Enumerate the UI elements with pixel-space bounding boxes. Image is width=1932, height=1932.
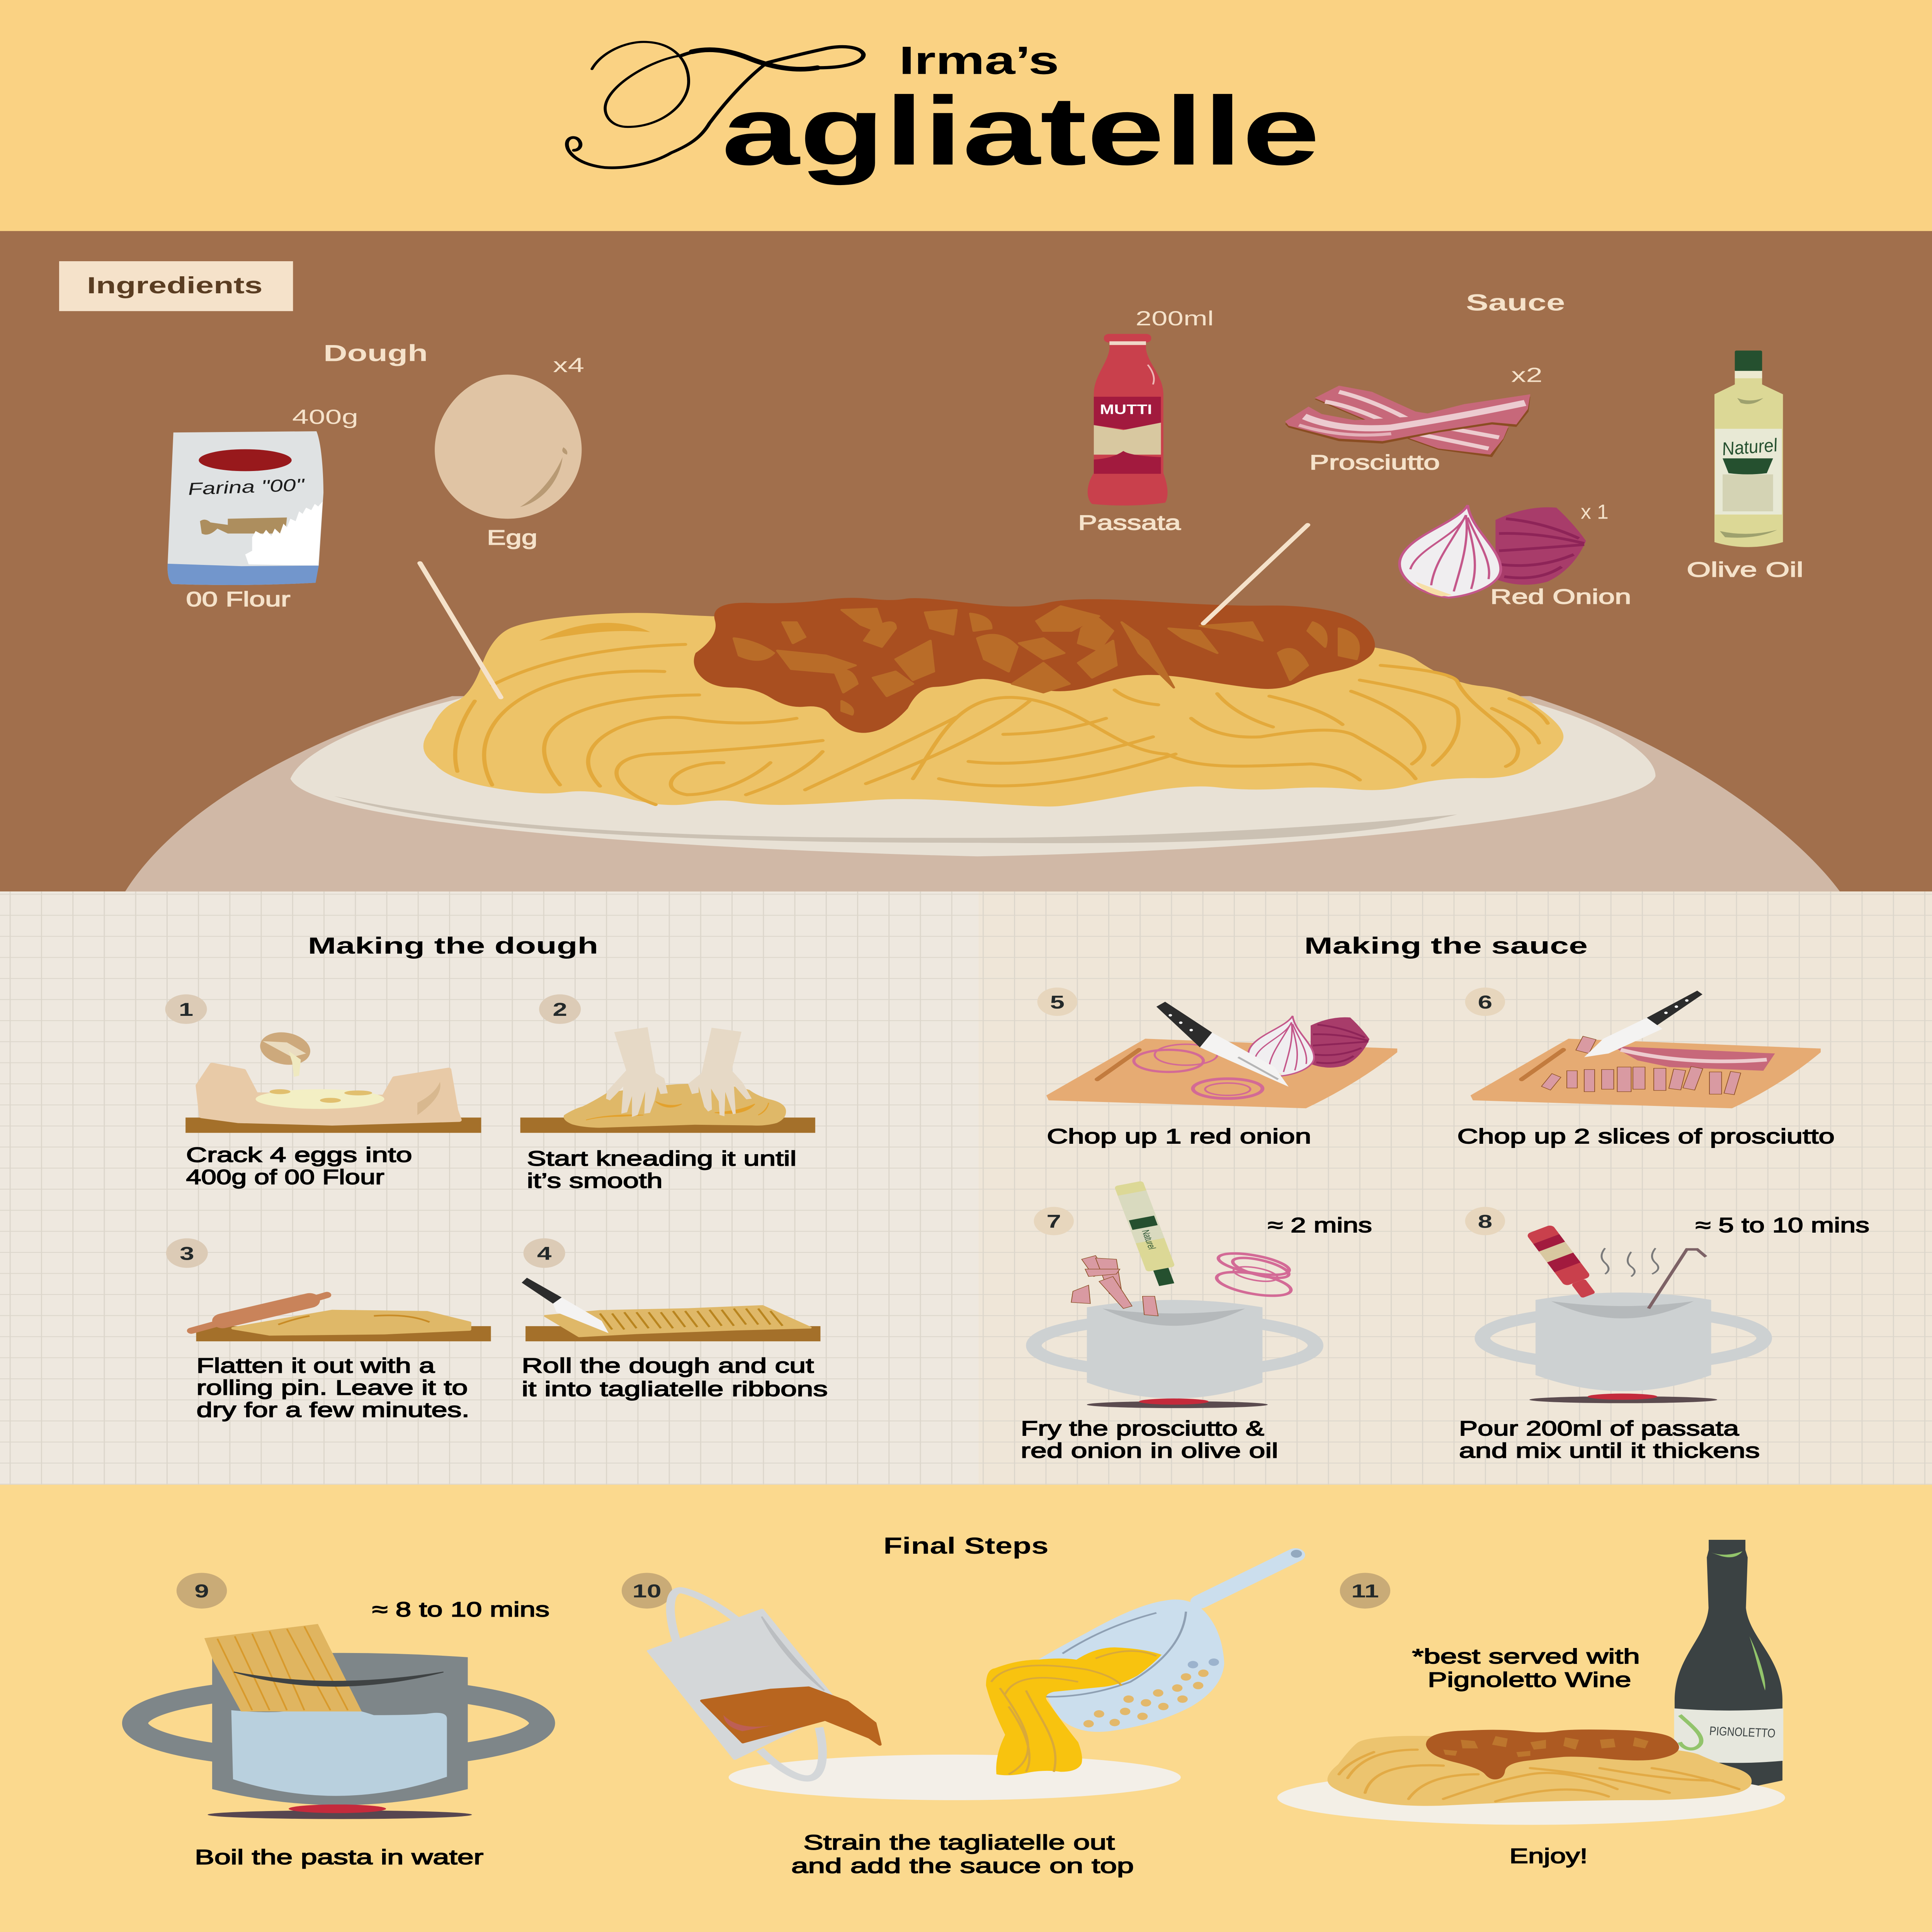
text: Flatten it out with a xyxy=(197,1354,435,1378)
text: Chop up 2 slices of prosciutto xyxy=(1457,1125,1835,1148)
step 9 xyxy=(135,1573,549,1869)
illustration: chopping onion xyxy=(1046,1002,1397,1108)
number badge: 3 xyxy=(180,1243,194,1264)
title main line: agliatelle xyxy=(722,77,1320,186)
plate shadow xyxy=(334,796,1457,843)
icon: red onion xyxy=(1400,505,1586,598)
title xyxy=(567,39,1320,186)
callout: wine pairing: *best served with xyxy=(1412,1645,1640,1668)
text: Crack 4 eggs into xyxy=(186,1143,412,1167)
label: flour quantity: 400g xyxy=(292,406,358,428)
number badge: 10 xyxy=(633,1581,662,1602)
panel: making the sauce xyxy=(1021,932,1869,1463)
timing: ≈ 2 mins xyxy=(1268,1214,1372,1237)
illustration: cutting ribbons xyxy=(522,1278,820,1341)
final steps background xyxy=(0,1485,1932,1932)
number badge: 7 xyxy=(1046,1211,1061,1232)
number badge: 8 xyxy=(1478,1211,1492,1232)
text: Enjoy! xyxy=(1509,1844,1588,1868)
text xyxy=(1459,1417,1760,1463)
icon: olive oil bottle xyxy=(1714,350,1783,547)
panel: making the dough xyxy=(165,932,828,1422)
number badge xyxy=(1340,1573,1390,1609)
step 3 xyxy=(166,1238,491,1422)
text: Pour 200ml of passata xyxy=(1459,1417,1739,1440)
text: and add the sauce on top xyxy=(791,1854,1134,1878)
ingredients heading: Ingredients xyxy=(87,272,263,298)
text: Roll the dough and cut xyxy=(522,1354,814,1378)
plate xyxy=(291,696,1655,856)
icon: flour bag xyxy=(168,431,323,585)
label: prosciutto quantity: x2 xyxy=(1511,364,1543,386)
sauce mince xyxy=(734,606,1359,714)
number badge xyxy=(1037,988,1077,1016)
callout: wine pairing: Pignoletto Wine xyxy=(1428,1668,1631,1692)
table xyxy=(125,696,1840,891)
text: it into tagliatelle ribbons xyxy=(522,1378,828,1401)
text: 400g of 00 Flour xyxy=(186,1165,384,1189)
number badge: 5 xyxy=(1050,992,1065,1013)
timing: ≈ 5 to 10 mins xyxy=(1696,1214,1869,1237)
heading: Making the dough xyxy=(308,932,598,959)
text: red onion in olive oil xyxy=(1021,1439,1278,1463)
label: flour: 00 Flour xyxy=(186,588,291,611)
ingredients background xyxy=(0,231,1932,891)
number badge: 11 xyxy=(1351,1581,1379,1602)
illustration: rolling pin xyxy=(191,1295,491,1341)
step 6 xyxy=(1457,988,1835,1148)
number badge: 6 xyxy=(1478,992,1492,1013)
number badge xyxy=(177,1573,227,1609)
paper background right xyxy=(979,891,1932,1485)
sauce on pasta xyxy=(694,598,1375,733)
label: onion quantity: x 1 xyxy=(1581,500,1609,523)
text: Strain the tagliatelle out xyxy=(803,1831,1115,1854)
text: dry for a few minutes. xyxy=(197,1398,469,1422)
icon: passata bottle xyxy=(1088,334,1168,505)
step 10 xyxy=(622,1550,1302,1878)
title small line: Irma’s xyxy=(899,39,1059,82)
paper background left xyxy=(0,891,979,1485)
step 4 xyxy=(522,1238,828,1401)
icon: egg xyxy=(435,374,582,519)
number badge xyxy=(1465,1207,1505,1235)
number badge xyxy=(1034,1207,1074,1235)
text xyxy=(197,1354,469,1422)
number badge xyxy=(1465,988,1505,1016)
illustration: pouring passata xyxy=(1483,1224,1764,1403)
illustration: chopping prosciutto xyxy=(1471,991,1821,1108)
text: and mix until it thickens xyxy=(1459,1439,1760,1463)
text: it’s smooth xyxy=(527,1169,663,1192)
step 5 xyxy=(1037,988,1397,1148)
label: egg quantity: x4 xyxy=(553,354,584,376)
label: olive oil: Olive Oil xyxy=(1687,558,1803,582)
timing: ≈ 8 to 10 mins xyxy=(372,1598,549,1621)
number badge xyxy=(622,1573,672,1609)
illustration: kneading hands xyxy=(520,1027,815,1133)
illustration: plate xyxy=(729,1755,1181,1800)
dough heading: Dough xyxy=(323,340,428,366)
header background xyxy=(0,0,1932,231)
script T swash xyxy=(567,42,864,168)
number badge: 2 xyxy=(553,1000,567,1020)
label: red onion: Red Onion xyxy=(1490,585,1631,609)
illustration: frying xyxy=(1034,1181,1316,1408)
number badge: 1 xyxy=(179,1000,193,1020)
text xyxy=(1021,1417,1278,1463)
text: Fry the prosciutto & xyxy=(1021,1417,1264,1440)
text: Boil the pasta in water xyxy=(195,1845,483,1869)
label: passata: Passata xyxy=(1078,511,1181,534)
illustration: tilted pot xyxy=(649,1590,880,1779)
text: rolling pin. Leave it to xyxy=(197,1376,468,1400)
pasta strands xyxy=(455,623,1548,804)
text: Start kneading it until xyxy=(527,1147,796,1170)
number badge: 9 xyxy=(194,1581,209,1602)
ingredients heading xyxy=(59,261,293,311)
label: egg: Egg xyxy=(487,526,537,549)
heading: Making the sauce xyxy=(1304,932,1588,959)
step 8 xyxy=(1459,1207,1869,1463)
text xyxy=(522,1354,828,1401)
label: prosciutto: Prosciutto xyxy=(1310,451,1440,474)
pasta xyxy=(423,613,1563,806)
icon: prosciutto xyxy=(1285,386,1530,457)
illustration: colander xyxy=(1038,1550,1302,1732)
text xyxy=(527,1147,796,1192)
number badge xyxy=(166,1238,208,1268)
number badge xyxy=(165,994,207,1024)
illustration: finished plate xyxy=(1277,1730,1785,1825)
illustration: frying: Naturel xyxy=(1139,1229,1158,1250)
number badge: 4 xyxy=(537,1243,552,1264)
illustration: pasta pouring xyxy=(986,1647,1162,1775)
illustration: boiling pasta xyxy=(135,1624,542,1819)
icon: olive oil bottle: Naturel xyxy=(1720,435,1779,459)
pointer line: dough to pasta xyxy=(420,563,501,697)
icon: wine bottle: PIGNOLETTO xyxy=(1709,1724,1776,1740)
number badge xyxy=(524,1238,565,1268)
icon: wine bottle xyxy=(1674,1540,1783,1786)
step 11 xyxy=(1277,1540,1785,1868)
sauce heading: Sauce xyxy=(1466,289,1565,316)
text xyxy=(791,1831,1134,1878)
icon: flour bag: Farina "00" xyxy=(187,475,306,499)
callout: wine pairing xyxy=(1412,1645,1640,1692)
step 7 xyxy=(1021,1181,1372,1463)
number badge xyxy=(539,994,581,1024)
label: passata quantity: 200ml xyxy=(1136,307,1214,330)
pointer line: sauce to pasta xyxy=(1203,525,1308,624)
illustration: finished dish xyxy=(125,598,1840,891)
panel: final steps xyxy=(135,1532,1785,1878)
text: Chop up 1 red onion xyxy=(1047,1125,1311,1148)
step 1 xyxy=(165,994,481,1189)
icon: passata bottle: MUTTI xyxy=(1100,402,1152,417)
text xyxy=(186,1143,412,1189)
heading: Final Steps xyxy=(883,1532,1049,1559)
illustration: egg on flour xyxy=(185,1026,481,1133)
step 2 xyxy=(520,994,815,1192)
panel: ingredients xyxy=(59,261,1840,891)
